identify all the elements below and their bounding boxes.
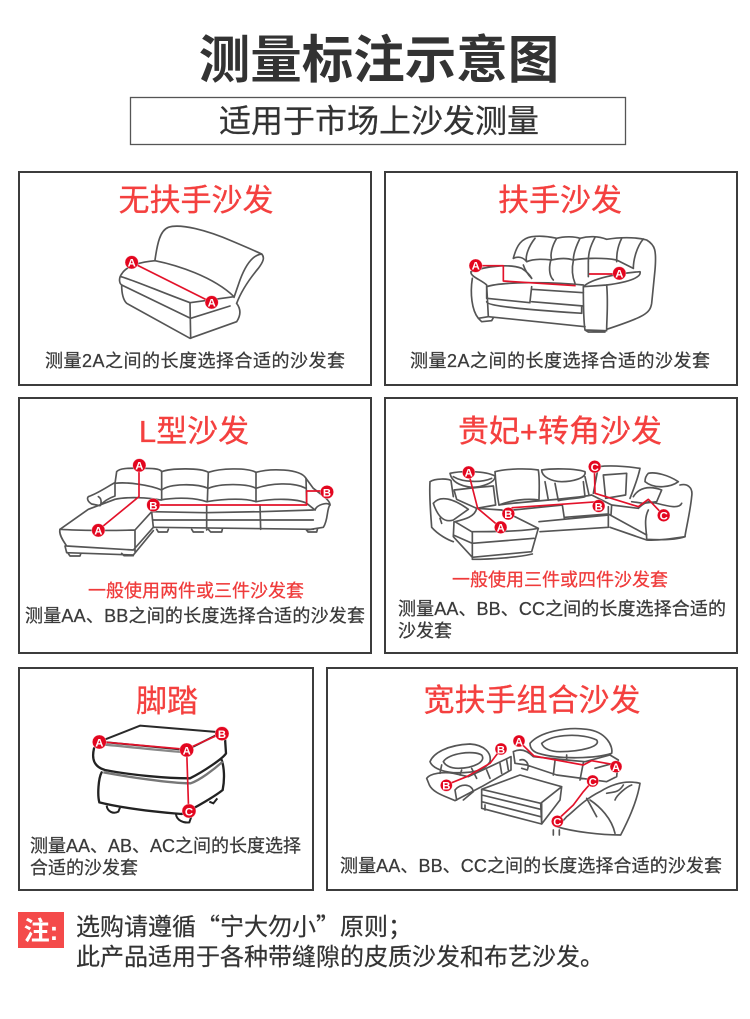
- marker A: A: [515, 736, 523, 748]
- marker C: [551, 815, 563, 829]
- marker A: A: [615, 268, 623, 280]
- marker A: [613, 267, 626, 280]
- marker A: A: [135, 461, 143, 473]
- illustration: armrest sofa: [469, 236, 656, 332]
- marker B: B: [218, 729, 226, 741]
- caption: 测量2A之间的长度选择合适的沙发套: [410, 351, 710, 371]
- marker B: [502, 507, 515, 521]
- marker A: A: [465, 468, 473, 480]
- caption second line: 沙发套: [398, 621, 452, 641]
- marker B: [592, 500, 605, 513]
- marker B: B: [149, 500, 157, 512]
- heading: footstool: 脚踏: [136, 684, 198, 719]
- marker C: [587, 775, 599, 788]
- marker A: [205, 296, 218, 309]
- marker B: B: [442, 781, 450, 793]
- illustration: L-shaped sofa: [60, 459, 334, 556]
- note badge: 注:: [24, 916, 58, 946]
- marker A: [462, 466, 475, 480]
- heading: armrest sofa: 扶手沙发: [498, 183, 622, 218]
- note text: 此产品适用于各种带缝隙的皮质沙发和布艺沙发。: [76, 937, 604, 972]
- note badge: [18, 912, 64, 948]
- marker A: A: [94, 526, 102, 538]
- marker A: A: [208, 297, 216, 309]
- marker C: C: [185, 806, 193, 818]
- marker C: C: [553, 817, 561, 829]
- marker A: [610, 761, 622, 774]
- marker C: C: [591, 462, 599, 474]
- marker C: C: [589, 776, 597, 788]
- caption: 测量AA、BB之间的长度选择合适的沙发套: [25, 606, 365, 626]
- red note: 一般使用三件或四件沙发套: [452, 570, 668, 590]
- caption: 测量2A之间的长度选择合适的沙发套: [45, 351, 345, 371]
- marker A: [92, 524, 105, 538]
- panel: chaise plus corner sofa: [385, 398, 737, 653]
- marker B: B: [504, 509, 512, 521]
- caption second line: 合适的沙发套: [30, 858, 138, 878]
- marker A: A: [128, 257, 136, 269]
- caption: 测量AA、BB、CC之间的长度选择合适的: [398, 599, 726, 619]
- marker A: A: [472, 261, 480, 273]
- marker B: B: [323, 487, 331, 499]
- note text: [76, 907, 604, 972]
- marker A: A: [497, 523, 505, 535]
- marker B: [440, 779, 452, 793]
- marker B: B: [595, 501, 603, 513]
- panel: armless sofa: [19, 172, 371, 385]
- red note: 一般使用两件或三件沙发套: [88, 581, 304, 601]
- marker A: [133, 459, 146, 473]
- heading: armless sofa: 无扶手沙发: [118, 183, 274, 218]
- panel: L-shaped sofa: [19, 398, 371, 653]
- panel: armrest sofa: [385, 172, 737, 385]
- marker A: A: [183, 745, 191, 757]
- marker A: [125, 256, 138, 269]
- title: 测量标注示意图: [199, 31, 559, 89]
- marker B: B: [497, 744, 505, 756]
- marker B: [320, 485, 334, 499]
- marker A: A: [612, 762, 620, 774]
- illustration: chaise plus corner sofa: [430, 460, 692, 559]
- panel: wide-arm combination sofa: [327, 668, 737, 890]
- caption: 测量AA、AB、AC之间的长度选择: [30, 836, 301, 856]
- illustration: armless sofa: [120, 226, 263, 338]
- note text: 选购请遵循“宁大勿小”原则；: [76, 907, 412, 942]
- heading: chaise plus corner sofa: 贵妃+转角沙发: [458, 414, 662, 449]
- marker A: A: [95, 737, 103, 749]
- marker A: [469, 259, 482, 273]
- marker A: [513, 735, 525, 748]
- heading: L-shaped sofa: L型沙发: [139, 414, 249, 449]
- heading: wide-arm combination sofa: 宽扶手组合沙发: [424, 683, 640, 718]
- marker B: [147, 498, 160, 512]
- illustration: footstool: [92, 726, 229, 823]
- marker C: [588, 460, 601, 474]
- caption: 测量AA、BB、CC之间的长度选择合适的沙发套: [340, 856, 722, 876]
- marker A: [494, 521, 507, 535]
- marker C: C: [660, 511, 668, 523]
- panel: footstool: [19, 668, 313, 890]
- marker C: [657, 509, 670, 523]
- illustration: wide-arm combination sofa: [427, 729, 640, 835]
- subtitle box: 适用于市场上沙发测量: [219, 103, 539, 139]
- marker B: [495, 743, 507, 756]
- subtitle box: [130, 98, 626, 144]
